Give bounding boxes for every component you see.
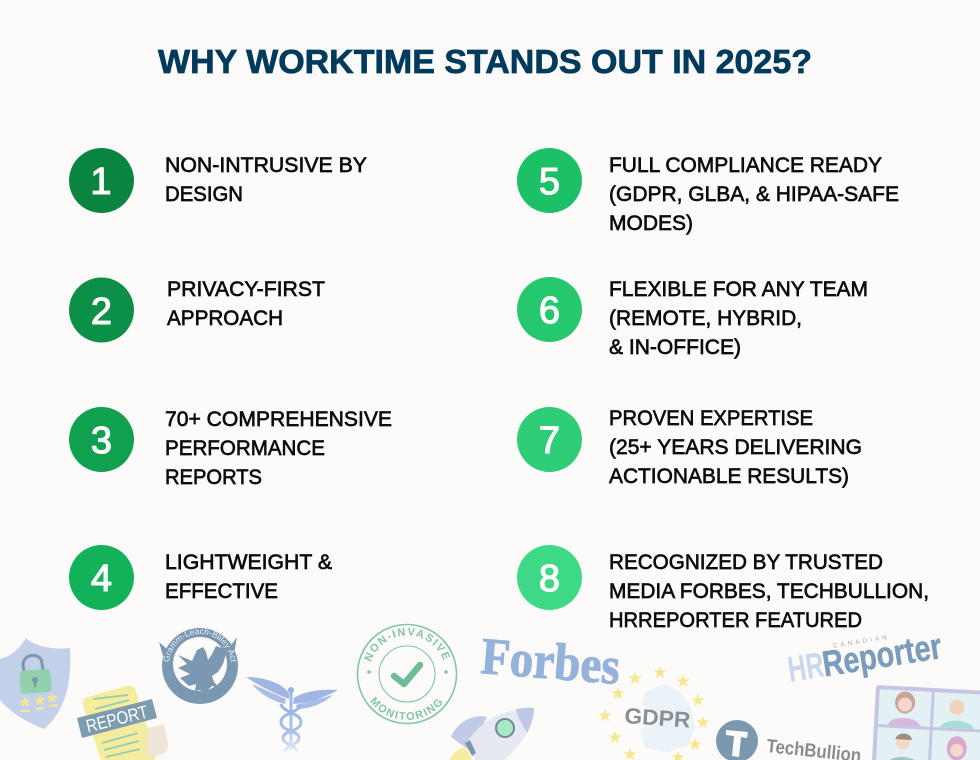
badge 2: 2 bbox=[91, 291, 112, 333]
logo: GDPR with EU stars: GDPR bbox=[624, 703, 691, 733]
logo: GDPR with EU stars: ★ bbox=[675, 672, 691, 691]
badge 1: 1 bbox=[90, 161, 112, 203]
label 6: & IN-OFFICE) bbox=[609, 336, 741, 359]
badge 3 bbox=[69, 407, 134, 472]
icon: video meeting screen bbox=[872, 685, 980, 760]
logo: GDPR with EU stars: ★ bbox=[687, 735, 703, 754]
label 4: LIGHTWEIGHT & bbox=[165, 551, 332, 574]
label 8: RECOGNIZED BY TRUSTED bbox=[609, 551, 883, 574]
label 2: APPROACH bbox=[167, 307, 283, 330]
icon: report document bbox=[77, 686, 168, 760]
icon: non-invasive monitoring stamp: NON-INVASIVE bbox=[364, 628, 450, 662]
icon: Gramm-Leach-Bliley Act seal bbox=[159, 628, 238, 704]
label 2 bbox=[167, 278, 325, 330]
icon: security shield: * bbox=[35, 691, 45, 718]
label 5 bbox=[609, 154, 899, 235]
icon: Gramm-Leach-Bliley Act seal: Gramm-Leach-Bliley Act bbox=[164, 628, 236, 662]
badge 5: 5 bbox=[539, 161, 560, 203]
label 8 bbox=[609, 551, 929, 632]
icon: non-invasive monitoring stamp: MONITORING bbox=[370, 696, 442, 720]
icon: report document: REPORT bbox=[84, 702, 150, 736]
badge 6: 6 bbox=[539, 290, 560, 332]
icon: non-invasive monitoring stamp bbox=[356, 624, 458, 724]
label 5: MODES) bbox=[609, 212, 693, 235]
title: WHY WORKTIME STANDS OUT IN 2025? bbox=[158, 43, 812, 80]
label 3 bbox=[165, 408, 392, 489]
badge 3: 3 bbox=[91, 420, 112, 462]
icon: security shield: * bbox=[47, 689, 57, 716]
item 7: proven expertise bbox=[517, 407, 862, 488]
logo: GDPR with EU stars: ★ bbox=[597, 706, 613, 725]
label 7: ACTIONABLE RESULTS) bbox=[609, 465, 849, 488]
logo: GDPR with EU stars: ★ bbox=[695, 713, 711, 732]
badge 8 bbox=[517, 545, 582, 610]
label 4: EFFECTIVE bbox=[165, 580, 278, 603]
label 7: PROVEN EXPERTISE bbox=[609, 407, 813, 430]
badge 4 bbox=[69, 545, 134, 610]
label 1 bbox=[165, 154, 367, 206]
badge 6 bbox=[517, 277, 582, 342]
label 1: DESIGN bbox=[165, 183, 243, 206]
logo: GDPR with EU stars: ★ bbox=[610, 684, 626, 703]
label 2: PRIVACY-FIRST bbox=[167, 278, 325, 301]
label 6 bbox=[609, 278, 868, 359]
label 5: FULL COMPLIANCE READY bbox=[609, 154, 882, 177]
label 3: 70+ COMPREHENSIVE bbox=[165, 408, 392, 431]
label 4 bbox=[165, 551, 332, 603]
item 5: full compliance bbox=[517, 148, 899, 235]
logo: TechBullion bbox=[716, 720, 862, 760]
badge 7 bbox=[517, 407, 582, 472]
icon: caduceus bbox=[246, 677, 338, 752]
logo: Canadian HR Reporter: Reporter bbox=[819, 625, 944, 684]
logo: Canadian HR Reporter: CANADIAN bbox=[832, 634, 890, 650]
label 7: (25+ YEARS DELIVERING bbox=[609, 436, 862, 459]
label 5: (GDPR, GLBA, & HIPAA-SAFE bbox=[609, 183, 899, 206]
label 1: NON-INTRUSIVE BY bbox=[165, 154, 367, 177]
logo: GDPR with EU stars: ★ bbox=[652, 663, 668, 682]
logo: Canadian HR Reporter: HR bbox=[785, 644, 827, 690]
logo: GDPR with EU stars: ★ bbox=[690, 691, 706, 710]
item 4: lightweight and effective bbox=[69, 545, 332, 610]
logo: GDPR with EU stars bbox=[597, 663, 711, 760]
item 8: recognized by media bbox=[517, 545, 929, 632]
badge 4: 4 bbox=[91, 558, 112, 600]
icon: security shield bbox=[0, 638, 70, 729]
label 3: REPORTS bbox=[165, 466, 262, 489]
badge 5 bbox=[517, 148, 582, 213]
label 3: PERFORMANCE bbox=[165, 437, 325, 460]
logo: GDPR with EU stars: ★ bbox=[627, 669, 643, 688]
item 6: flexible for any team bbox=[517, 277, 868, 359]
label 7 bbox=[609, 407, 862, 488]
badge 7: 7 bbox=[539, 420, 560, 462]
logo: Forbes: Forbes bbox=[479, 628, 622, 696]
logo: GDPR with EU stars: ★ bbox=[607, 728, 623, 747]
label 6: (REMOTE, HYBRID, bbox=[609, 307, 802, 330]
badge 1 bbox=[69, 148, 134, 213]
badge 8: 8 bbox=[539, 558, 560, 600]
label 8: HRREPORTER FEATURED bbox=[609, 609, 862, 632]
icon: rocket bbox=[450, 708, 534, 760]
logo: Canadian HR Reporter bbox=[785, 625, 944, 690]
badge 2 bbox=[69, 278, 134, 342]
item 1: non-intrusive by design bbox=[69, 148, 367, 213]
item 3: performance reports bbox=[69, 407, 392, 489]
label 6: FLEXIBLE FOR ANY TEAM bbox=[609, 278, 868, 301]
icon: security shield: * bbox=[20, 693, 30, 720]
item 2: privacy-first approach bbox=[69, 278, 325, 342]
label 8: MEDIA FORBES, TECHBULLION, bbox=[609, 580, 929, 603]
